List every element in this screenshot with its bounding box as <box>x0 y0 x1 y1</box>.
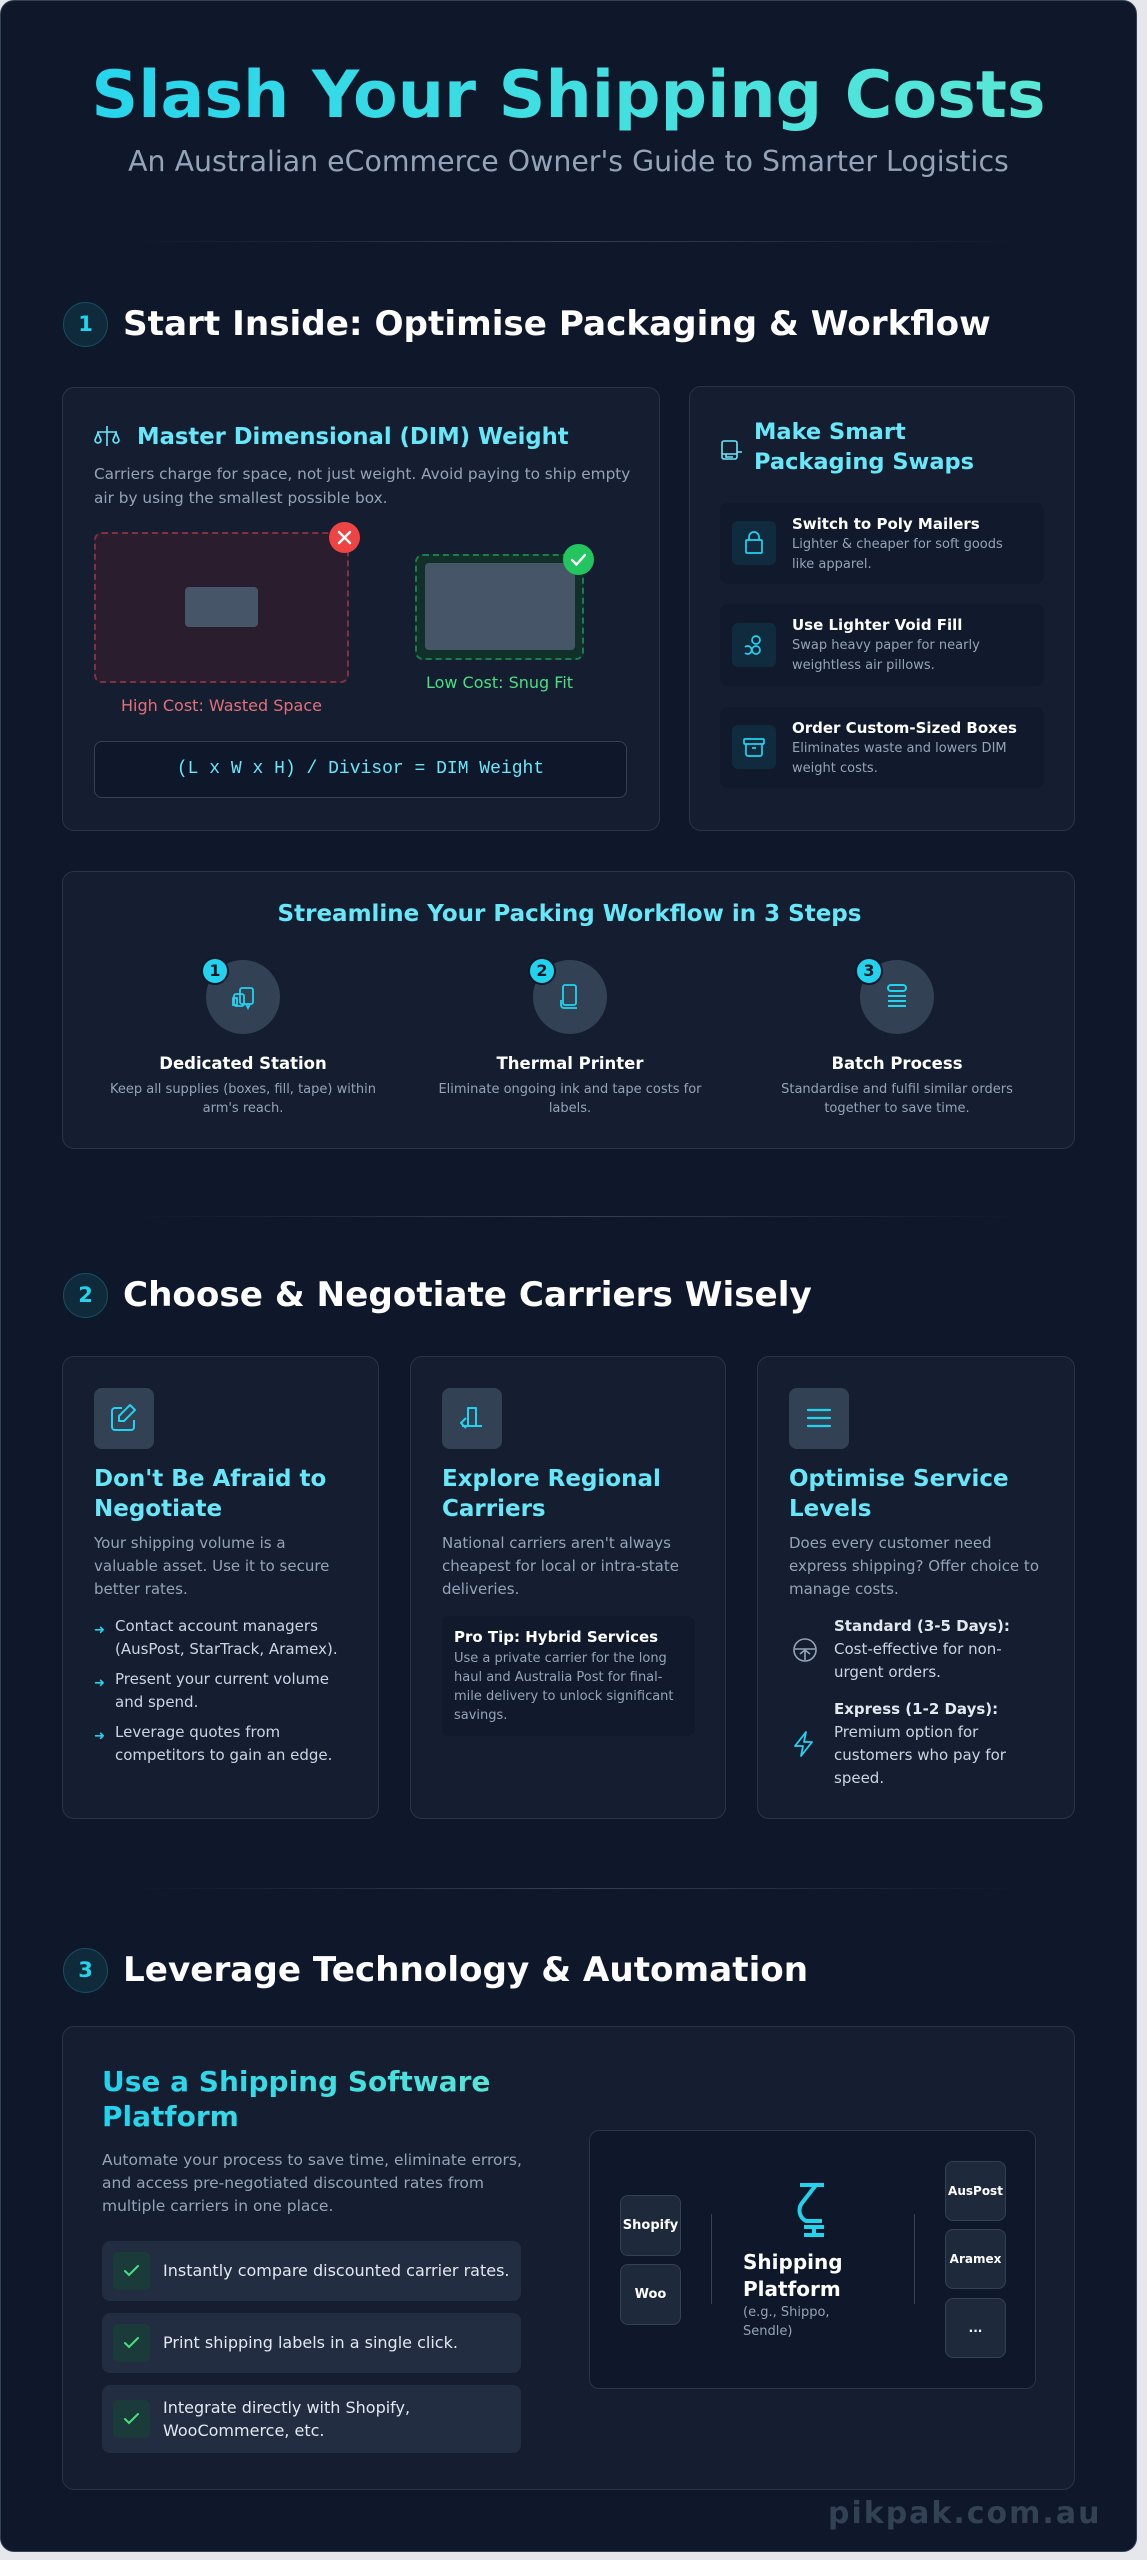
icon: green check <box>563 544 594 575</box>
step 3: Standardise and fulfil similar orders <box>781 1082 1013 1097</box>
item 2 <box>102 2313 521 2373</box>
description: and access pre-negotiated discounted rates from <box>102 2174 484 2192</box>
heading: Negotiate <box>94 1496 222 1522</box>
section 2 number <box>63 1273 108 1318</box>
item: void fill: weightless air pillows. <box>792 658 935 673</box>
section 2 heading: Choose & Negotiate Carriers Wisely <box>123 1275 812 1315</box>
step 2: 2 <box>536 961 548 980</box>
bullet list: ➜ <box>94 1623 105 1638</box>
step 1: 1 <box>209 961 221 980</box>
heading: Platform <box>102 2100 239 2133</box>
panel: negotiate <box>62 1356 379 1819</box>
step 3: Batch Process <box>831 1054 963 1073</box>
item: poly mailers: Switch to Poly Mailers <box>792 515 980 533</box>
item: void fill: Use Lighter Void Fill <box>792 616 962 634</box>
woo <box>620 2264 681 2325</box>
heading: Carriers <box>442 1496 546 1522</box>
callout: pro tip <box>442 1616 695 1736</box>
description: Does every customer need <box>789 1534 992 1552</box>
section 3 number <box>63 1948 108 1993</box>
item 1 <box>102 2241 521 2301</box>
standard option: urgent orders. <box>834 1663 941 1681</box>
description <box>442 1534 679 1598</box>
express option: Premium option for <box>834 1723 978 1741</box>
callout: pro tip: Pro Tip: Hybrid Services <box>454 1628 658 1646</box>
item: custom boxes: Eliminates waste and lowers DIM <box>792 741 1007 756</box>
auspost: AusPost <box>948 2184 1003 2198</box>
formula <box>94 741 627 798</box>
diagram: platform <box>589 2130 1036 2389</box>
heading <box>442 1466 661 1522</box>
heading: Optimise Service <box>789 1466 1009 1492</box>
bullet list <box>94 1617 338 1764</box>
panel: packaging swaps <box>689 386 1075 831</box>
panel: workflow <box>62 871 1075 1149</box>
callout: pro tip: savings. <box>454 1708 507 1723</box>
shopify: Shopify <box>623 2218 678 2233</box>
description: Your shipping volume is a <box>94 1534 286 1552</box>
description <box>102 2151 522 2215</box>
formula: (L x W x H) / Divisor = DIM Weight <box>177 759 544 779</box>
subtitle: An Australian eCommerce Owner's Guide to Smarter Logistics <box>128 145 1009 178</box>
panel: DIM weight <box>62 387 660 831</box>
heading: Streamline Your Packing Workflow in 3 Steps <box>278 901 861 927</box>
item: void fill: Swap heavy paper for nearly <box>792 638 980 653</box>
callout: pro tip: Use a private carrier for the long <box>454 1651 667 1666</box>
step 1: arm's reach. <box>203 1101 283 1116</box>
section 1 number <box>63 302 108 347</box>
step 1 <box>110 959 376 1116</box>
description: cheapest for local or intra-state <box>442 1557 679 1575</box>
icon: red cross <box>329 522 360 553</box>
step 2 <box>438 959 702 1116</box>
description: multiple carriers in one place. <box>102 2197 333 2215</box>
item 3 <box>102 2385 521 2453</box>
heading: Don't Be Afraid to <box>94 1466 326 1492</box>
panel: service levels <box>757 1356 1075 1819</box>
heading: Packaging Swaps <box>754 449 974 475</box>
step 3: 3 <box>863 961 875 980</box>
icon: platform <box>798 2183 824 2237</box>
description <box>94 1534 329 1598</box>
step 1: Keep all supplies (boxes, fill, tape) within <box>110 1082 376 1097</box>
step 1: Dedicated Station <box>159 1054 327 1073</box>
standard option <box>793 1617 1010 1681</box>
item: void fill <box>720 604 1044 686</box>
shopify <box>620 2195 681 2256</box>
standard option: Cost-effective for non- <box>834 1640 1002 1658</box>
description: express shipping? Offer choice to <box>789 1557 1039 1575</box>
heading <box>754 419 974 475</box>
bullet list: Present your current volume <box>115 1670 329 1688</box>
heading: Levels <box>789 1496 871 1522</box>
icon: scale <box>94 426 120 446</box>
icon: box <box>721 440 742 460</box>
section 2 number: 2 <box>78 1283 93 1307</box>
platform label: Shipping <box>743 2250 843 2274</box>
heading: Explore Regional <box>442 1466 661 1492</box>
heading: Use a Shipping Software <box>102 2065 490 2098</box>
callout: pro tip: haul and Australia Post for final- <box>454 1670 662 1685</box>
aramex <box>945 2229 1006 2289</box>
bullet list: competitors to gain an edge. <box>115 1746 332 1764</box>
more <box>945 2298 1006 2358</box>
icon: pencil <box>94 1388 154 1449</box>
express option: customers who pay for <box>834 1746 1006 1764</box>
express option: speed. <box>834 1769 884 1787</box>
description: Carriers charge for space, not just weight. Avoid paying to ship empty air by using the smallest possible box. <box>94 465 630 507</box>
aramex: Aramex <box>950 2252 1001 2266</box>
step 2: labels. <box>549 1101 591 1116</box>
description: deliveries. <box>442 1580 519 1598</box>
auspost <box>945 2161 1006 2221</box>
woo: Woo <box>635 2287 666 2302</box>
diagram: platform: Sendle) <box>743 2324 792 2339</box>
diagram: platform: (e.g., Shippo, <box>743 2305 830 2320</box>
diagram: snug box <box>415 554 584 660</box>
description: better rates. <box>94 1580 188 1598</box>
bullet list: and spend. <box>115 1693 198 1711</box>
panel: regional carriers <box>410 1356 726 1819</box>
bullet list: Leverage quotes from <box>115 1723 280 1741</box>
description: National carriers aren't always <box>442 1534 671 1552</box>
more: ... <box>969 2321 982 2335</box>
watermark: pikpak.com.au <box>828 2496 1101 2531</box>
platform label <box>743 2250 843 2301</box>
bullet list: ➜ <box>94 1729 105 1744</box>
heading <box>94 1466 326 1522</box>
callout: pro tip: mile delivery to unlock significant <box>454 1689 674 1704</box>
description: valuable asset. Use it to secure <box>94 1557 329 1575</box>
item 2: Print shipping labels in a single click. <box>163 2333 458 2352</box>
heading: Master Dimensional (DIM) Weight <box>137 424 569 450</box>
heading <box>789 1466 1009 1522</box>
bullet list: ➜ <box>94 1676 105 1691</box>
description <box>789 1534 1039 1598</box>
section 1 heading: Start Inside: Optimise Packaging & Workflow <box>123 304 991 344</box>
panel: shipping software <box>62 2026 1075 2490</box>
description: manage costs. <box>789 1580 899 1598</box>
express option <box>794 1700 1006 1787</box>
label low cost: Low Cost: Snug Fit <box>426 673 573 692</box>
step 2: Thermal Printer <box>497 1054 643 1073</box>
section 3 heading: Leverage Technology & Automation <box>123 1950 808 1990</box>
item: custom boxes: weight costs. <box>792 761 878 776</box>
item: poly mailers: Lighter & cheaper for soft goods <box>792 537 1003 552</box>
express option: Express (1-2 Days): <box>834 1700 998 1718</box>
bullet list: Contact account managers <box>115 1617 318 1635</box>
item: poly mailers <box>720 503 1044 584</box>
item: custom boxes <box>720 707 1044 788</box>
step 2: Eliminate ongoing ink and tape costs for <box>438 1082 702 1097</box>
item 3: Integrate directly with Shopify, <box>163 2398 410 2417</box>
title: Slash Your Shipping Costs <box>91 58 1046 133</box>
item: poly mailers: like apparel. <box>792 557 872 572</box>
standard option: Standard (3-5 Days): <box>834 1617 1010 1635</box>
bullet list: (AusPost, StarTrack, Aramex). <box>115 1640 338 1658</box>
section 1 number: 1 <box>78 312 93 336</box>
item 3: WooCommerce, etc. <box>163 2421 324 2440</box>
item: custom boxes: Order Custom-Sized Boxes <box>792 719 1017 737</box>
item 1: Instantly compare discounted carrier rates. <box>163 2261 510 2280</box>
icon: list <box>789 1388 849 1449</box>
heading: Make Smart <box>754 419 906 445</box>
platform label: Platform <box>743 2277 841 2301</box>
checklist <box>102 2241 521 2453</box>
step 3: together to save time. <box>824 1101 970 1116</box>
icon: truck <box>442 1388 502 1449</box>
heading <box>102 2064 562 2134</box>
description: Automate your process to save time, eliminate errors, <box>102 2151 522 2169</box>
diagram: wasted space box <box>94 532 349 683</box>
step 3 <box>781 959 1013 1116</box>
section 3 number: 3 <box>78 1958 93 1982</box>
label high cost: High Cost: Wasted Space <box>121 696 322 715</box>
